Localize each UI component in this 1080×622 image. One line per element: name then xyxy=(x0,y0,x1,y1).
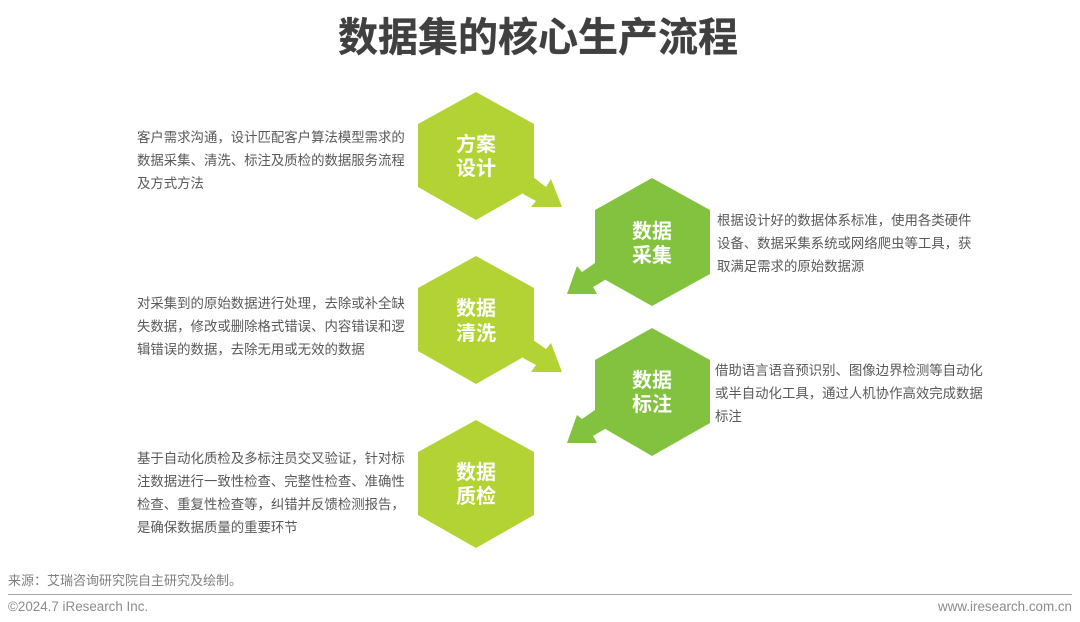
text: data labeling description: 标注 xyxy=(715,409,742,424)
hexagon: plan design: 方案 xyxy=(456,132,496,156)
text: data quality check description: 是确保数据质量的重要环节 xyxy=(137,520,298,535)
text: data quality check description: 检查、重复性检查等，纠错并反馈检测报告， xyxy=(137,497,405,512)
hexagon: data labeling: 标注 xyxy=(632,393,672,416)
text: data collection description: 取满足需求的原始数据源 xyxy=(717,259,864,274)
hexagon: data collection xyxy=(595,178,710,306)
hexagon: data cleaning: 数据 xyxy=(456,297,496,320)
hexagon: data quality check: 质检 xyxy=(456,484,496,508)
text: data collection description: 根据设计好的数据体系标准，使用各类硬件 xyxy=(717,213,971,228)
copyright: ©2024.7 iResearch Inc. xyxy=(8,599,148,614)
text: data quality check description: 基于自动化质检及多标注员交叉验证，针对标 xyxy=(137,451,405,466)
arrow: collection to cleaning xyxy=(567,263,605,294)
text: plan design description: 及方式方法 xyxy=(137,176,204,191)
hexagon: plan design: 设计 xyxy=(456,157,496,180)
arrow: cleaning to labeling xyxy=(523,340,562,372)
source note: 来源：艾瑞咨询研究院自主研究及绘制。 xyxy=(8,573,242,588)
text: data cleaning description xyxy=(137,296,405,357)
hexagon: data collection: 采集 xyxy=(632,244,672,267)
hexagon: data collection: 数据 xyxy=(632,220,672,243)
website: www.iresearch.com.cn xyxy=(938,599,1072,614)
text: data quality check description xyxy=(137,451,405,535)
hexagon: data labeling: 数据 xyxy=(632,369,672,392)
text: data cleaning description: 辑错误的数据，去除无用或无效的数据 xyxy=(137,342,365,357)
text: data labeling description xyxy=(715,363,983,424)
text: plan design description xyxy=(137,130,405,191)
arrow: labeling to quality check xyxy=(567,410,605,443)
hexagon: data labeling xyxy=(595,328,710,456)
text: data cleaning description: 对采集到的原始数据进行处理，去除或补全缺 xyxy=(137,296,405,311)
text: data labeling description: 或半自动化工具，通过人机协作高效完成数据 xyxy=(715,386,983,401)
text: data quality check description: 注数据进行一致性检查、完整性检查、准确性 xyxy=(137,474,405,489)
hexagon: data cleaning: 清洗 xyxy=(456,322,496,345)
text: data collection description xyxy=(717,213,971,274)
text: data labeling description: 借助语言语音预识别、图像边界检测等自动化 xyxy=(715,363,983,378)
hexagon: data quality check xyxy=(418,420,534,548)
text: plan design description: 数据采集、清洗、标注及质检的数据服务流程 xyxy=(137,153,405,168)
text: data cleaning description: 失数据，修改或删除格式错误、内容错误和逻 xyxy=(137,319,405,334)
hexagon: data cleaning xyxy=(418,256,534,384)
text: data collection description: 设备、数据采集系统或网络爬虫等工具，获 xyxy=(717,236,971,251)
hexagon: data quality check: 数据 xyxy=(456,461,496,484)
title: 数据集的核心生产流程 xyxy=(338,16,738,60)
text: plan design description: 客户需求沟通，设计匹配客户算法模型需求的 xyxy=(137,130,405,145)
hexagon: plan design xyxy=(418,92,534,220)
arrow: plan to collection xyxy=(523,177,562,207)
